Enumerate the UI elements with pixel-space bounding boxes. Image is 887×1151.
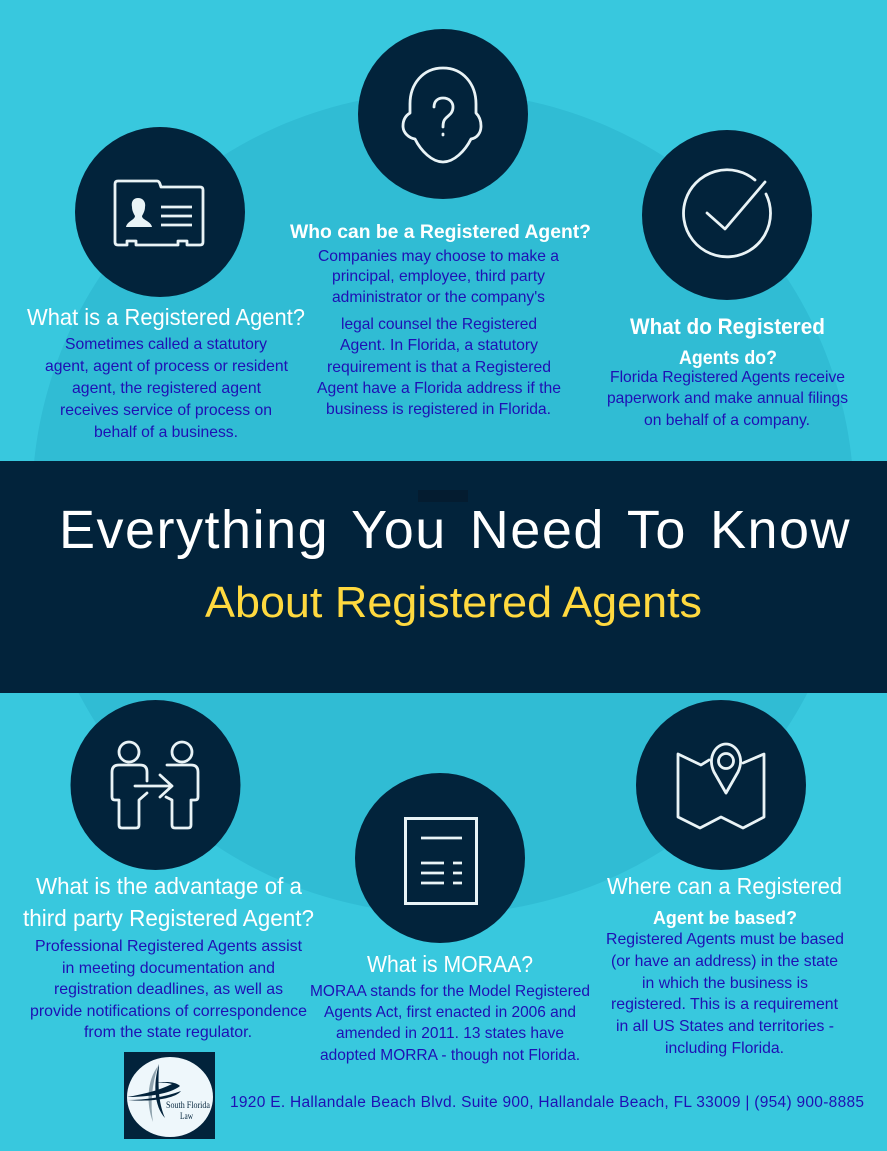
logo: South Florida Law: South Florida xyxy=(166,1101,211,1111)
heading: Agents do? xyxy=(679,347,777,369)
body text: Professional Registered Agents assist xyxy=(35,938,303,955)
heading: What is a Registered Agent? xyxy=(27,304,305,330)
body text: legal counsel the Registered xyxy=(341,316,537,333)
body text: Agents Act, first enacted in 2006 and xyxy=(324,1004,576,1021)
body text: Companies may choose to make a xyxy=(318,248,559,265)
body text: in all US States and territories - xyxy=(616,1018,834,1035)
panel: who can be a registered agent xyxy=(290,29,591,418)
body text: principal, employee, third party xyxy=(332,268,545,285)
body text: Agent have a Florida address if the xyxy=(317,380,561,397)
panel: what do registered agents do xyxy=(607,130,848,429)
icon: document xyxy=(355,773,525,943)
body text: in meeting documentation and xyxy=(62,960,275,977)
panel: advantage of a third party registered agent xyxy=(23,700,314,1041)
body text: provide notifications of correspondence xyxy=(30,1003,307,1020)
background large circle xyxy=(32,92,854,914)
body text: Florida Registered Agents receive xyxy=(610,369,845,386)
heading: third party Registered Agent? xyxy=(23,905,314,931)
heading: Who can be a Registered Agent? xyxy=(290,221,591,243)
heading xyxy=(630,314,825,369)
icon: two people with arrow xyxy=(70,700,240,870)
heading xyxy=(23,873,314,931)
panel: where can a registered agent be based xyxy=(606,700,844,1057)
body text xyxy=(30,938,307,1041)
body text: from the state regulator. xyxy=(84,1024,252,1041)
heading xyxy=(607,873,842,928)
body text: registration deadlines, as well as xyxy=(54,981,283,998)
body text: receives service of process on xyxy=(60,402,272,419)
icon: ID card xyxy=(75,127,245,297)
logo: South Florida Law: Law xyxy=(180,1111,193,1121)
body text: administrator or the company's xyxy=(332,289,545,306)
icon: head with question mark xyxy=(358,29,528,199)
main title: Everything You Need To Know xyxy=(59,500,851,560)
body text xyxy=(606,931,844,1057)
body text: Sometimes called a statutory xyxy=(65,336,267,353)
body text: paperwork and make annual filings xyxy=(607,390,848,407)
heading: What do Registered xyxy=(630,314,825,339)
body text: Agent. In Florida, a statutory xyxy=(340,337,538,354)
body text: behalf of a business. xyxy=(94,424,238,441)
body text: adopted MORRA - though not Florida. xyxy=(320,1047,580,1064)
heading: What is MORAA? xyxy=(367,951,533,977)
icon: map with pin xyxy=(636,700,806,870)
heading: Agent be based? xyxy=(653,907,797,928)
body text: amended in 2011. 13 states have xyxy=(336,1025,564,1042)
panel: what is MORAA xyxy=(310,773,590,1064)
body text xyxy=(45,336,289,441)
heading: Where can a Registered xyxy=(607,873,842,899)
icon: check mark in circle xyxy=(642,130,812,300)
central banner xyxy=(0,461,887,693)
body text: agent, agent of process or resident xyxy=(45,358,289,375)
body text xyxy=(607,369,848,429)
subtitle: About Registered Agents xyxy=(205,578,702,627)
body text: on behalf of a company. xyxy=(644,412,810,429)
body text xyxy=(317,248,561,418)
body text: (or have an address) in the state xyxy=(611,953,838,970)
body text: in which the business is xyxy=(642,975,808,992)
panel: what is a registered agent xyxy=(27,127,305,441)
body text: registered. This is a requirement xyxy=(611,996,839,1013)
body text: agent, the registered agent xyxy=(72,380,262,397)
body text: requirement is that a Registered xyxy=(327,359,551,376)
body text: Registered Agents must be based xyxy=(606,931,844,948)
body text xyxy=(310,983,590,1064)
footer address: 1920 E. Hallandale Beach Blvd. Suite 900, Hallandale Beach, FL 33009 | (954) 900-8885 xyxy=(230,1094,864,1111)
body text: business is registered in Florida. xyxy=(326,401,551,418)
logo: South Florida Law xyxy=(124,1052,215,1139)
body text: including Florida. xyxy=(665,1040,784,1057)
body text: MORAA stands for the Model Registered xyxy=(310,983,590,1000)
heading: What is the advantage of a xyxy=(36,873,302,899)
